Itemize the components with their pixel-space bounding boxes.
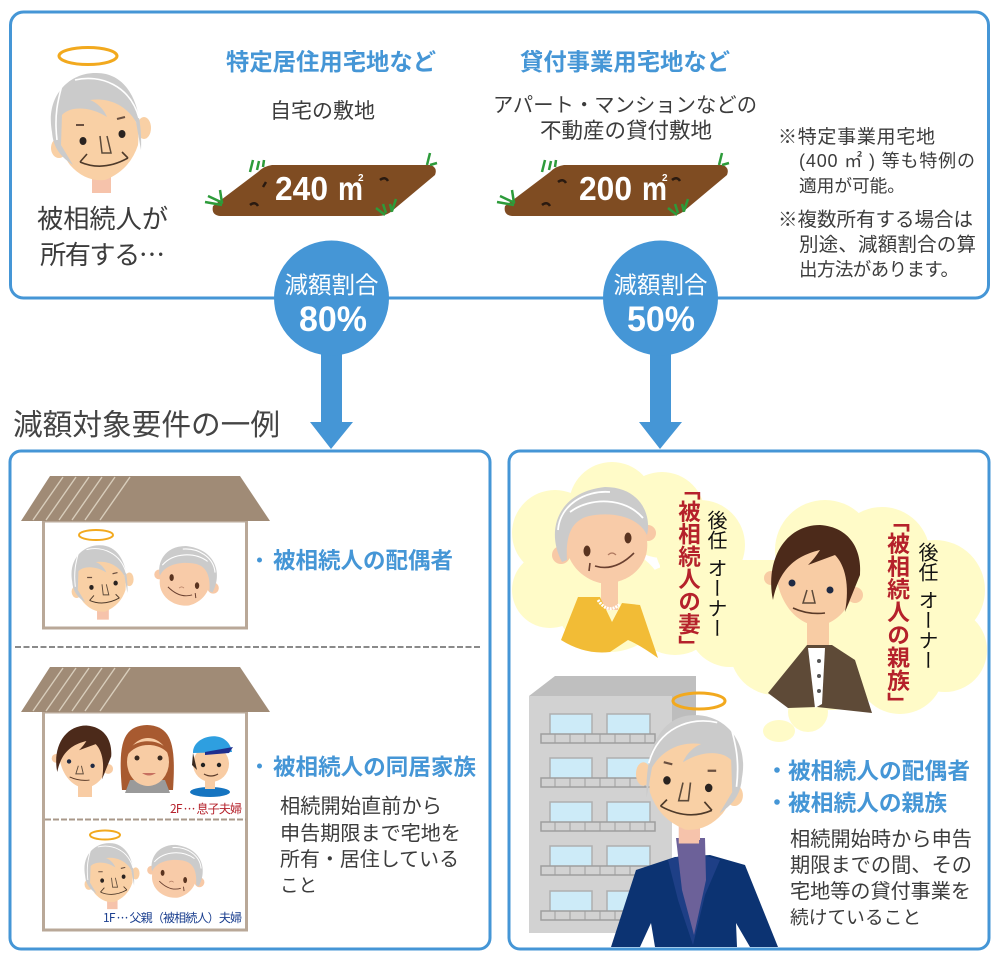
text: successor owner left: オーナー [704,558,726,638]
text: spouse requirement: 被相続人の配偶者 [273,548,453,574]
text: cohabiting family requirement: こと [280,875,317,896]
heading: requirement examples: 減額対象要件の一例 [13,409,280,442]
icon: soil plot 200: 2 [662,173,668,184]
heading: rental land: 貸付事業用宅地など [520,49,730,75]
text: cohabiting family requirement: 所有・居住している [280,848,459,871]
text: successor owner right: 後任 [915,542,938,582]
icon: soil plot 200: 200 [579,170,632,207]
illustration: relative [764,525,872,713]
badge: 50 percent: 50% [627,300,695,339]
text: right requirements: 期限までの間、その [790,854,972,877]
label: second floor: 2F … 息子夫婦 [170,800,242,817]
text: heir is the wife: 被相続人の妻 [676,500,701,635]
illustration: owner in suit [611,693,778,947]
icon: soil plot 200 [497,153,729,216]
text: right requirements: 相続開始時から申告 [790,828,972,851]
illustration: thought cloud [512,462,987,742]
text: deceased owner owns: 被相続人が [37,204,168,234]
text: cohabiting family requirement: 相続開始直前から [280,795,442,818]
text: right requirements: 被相続人の配偶者 [788,758,970,784]
text: cohabiting family requirement [257,755,476,896]
icon: deceased owner with halo [51,48,151,193]
badge: 80 percent: 減額割合 [284,272,378,298]
icon: daughter-in-law [121,725,174,793]
text: own home site: 自宅の敷地 [270,100,375,123]
arrow: left reduction [310,340,353,449]
badge: 50 percent [603,240,718,356]
arrow: right reduction [639,340,682,449]
text: successor owner left: 後任 [704,510,727,550]
text: rental description: 不動産の貸付敷地 [540,119,712,143]
text: deceased owner owns [37,204,168,272]
panel: top owned land [10,12,988,298]
text: successor owner right: オーナー [915,590,937,670]
panel: right requirements [509,451,989,949]
text: cohabiting family requirement: 申告期限まで宅地を [280,822,461,845]
illustration: two-storey house with family [21,667,270,930]
text: cohabiting family requirement: 被相続人の同居家族 [273,755,476,780]
text: right requirements: 被相続人の親族 [788,790,947,816]
text: side notes: ※複数所有する場合は [778,209,973,231]
illustration: apartment building [529,676,696,933]
text: right requirements [774,758,972,928]
badge: 50 percent: 減額割合 [614,272,708,298]
text: heir is a relative: 「 [884,510,910,533]
text: heir is the wife: 」 [676,635,701,658]
text: side notes [778,126,976,280]
icon: soil plot 240: 2 [358,173,364,184]
text: heir is a relative: 被相続人の親族 [884,532,910,692]
icon: grandchild in cap [190,736,233,797]
text: side notes: 適用が可能。 [799,176,905,196]
text: successor owner left [704,510,727,638]
text: side notes: ※特定事業用宅地 [778,126,935,148]
text: side notes: 出方法があります。 [799,259,959,280]
text: heir is the wife: 「 [676,478,700,500]
icon: soil plot 240: m [338,170,363,207]
text: heir is a relative: 」 [884,692,910,715]
text: rental description [493,94,757,143]
illustration: house with couple [21,476,270,628]
text: successor owner right [915,542,938,670]
text: rental description: アパート・マンションなどの [493,94,757,117]
icon: son [52,726,113,797]
illustration: wife [552,487,658,658]
badge: 80 percent [274,240,389,356]
icon: soil plot 240: 240 [275,170,328,207]
text: deceased owner owns: 所有する… [40,234,165,272]
text: side notes: (400 ㎡ ) 等も特例の [799,150,975,171]
heading: residential land: 特定居住用宅地など [226,49,436,75]
icon: soil plot 200: m [642,170,667,207]
panel: left requirements [10,451,490,949]
badge: 80 percent: 80% [299,300,367,339]
text: right requirements: 宅地等の貸付事業を [790,880,971,903]
icon: soil plot 240 [205,153,437,216]
label: first floor: 1F … 父親（被相続人）夫婦 [103,909,242,926]
text: side notes: 別途、減額割合の算 [799,234,976,256]
text: right requirements: 続けていること [790,907,921,928]
